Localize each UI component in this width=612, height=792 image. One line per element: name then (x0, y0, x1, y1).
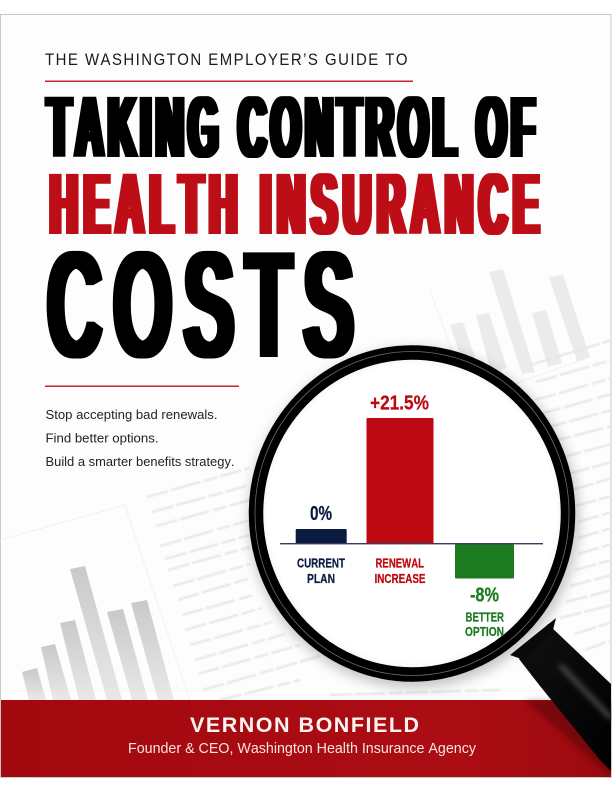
label: renewal increase: RENEWAL (376, 556, 424, 570)
handle shadow (525, 700, 611, 777)
tagline 2: Find better options. (46, 430, 158, 446)
label: better option: OPTION (465, 624, 504, 639)
handle collar (510, 618, 556, 660)
author role: Founder & CEO, Washington Health Insurance Agency (128, 741, 477, 757)
label: current plan: CURRENT (297, 556, 345, 570)
background chart: lower left (22, 566, 174, 700)
background chart: upper right (450, 269, 590, 374)
axis (280, 543, 543, 544)
label: current plan (297, 556, 345, 586)
lens shadow (249, 348, 579, 688)
label: renewal increase (374, 556, 426, 586)
bar chart (280, 392, 543, 639)
label: renewal increase: INCREASE (374, 571, 426, 586)
label: better option (465, 610, 504, 639)
bar: current plan (296, 529, 347, 544)
value: +21.5%: +21.5% (370, 392, 429, 414)
background document rows (147, 340, 612, 700)
value: -8%: -8% (470, 584, 499, 606)
tagline 1: Stop accepting bad renewals. (46, 407, 218, 422)
label: current plan: PLAN (307, 571, 335, 586)
ring highlight (255, 352, 569, 676)
bar: renewal increase (366, 418, 434, 544)
title line 1: TAKING CONTROL OF (48, 79, 535, 176)
header line: THE WASHINGTON EMPLOYER’S GUIDE TO (45, 51, 408, 69)
label: better option: BETTER (466, 610, 504, 624)
banner (1, 700, 611, 777)
tagline (46, 407, 234, 469)
handle (519, 624, 611, 771)
red rule: lower (45, 386, 239, 387)
tagline 3: Build a smarter benefits strategy. (46, 454, 234, 469)
author name: VERNON BONFIELD (190, 713, 419, 737)
lens (256, 352, 568, 674)
value: 0%: 0% (310, 503, 332, 525)
title line 3: COSTS (47, 220, 354, 390)
handle highlight (560, 665, 611, 718)
magnifying glass (249, 348, 611, 777)
bar: better option (455, 544, 514, 578)
title line 2: HEALTH INSURANCE (50, 156, 539, 253)
background: faint chart grid lines (0, 290, 590, 700)
red rule: top (45, 80, 413, 82)
